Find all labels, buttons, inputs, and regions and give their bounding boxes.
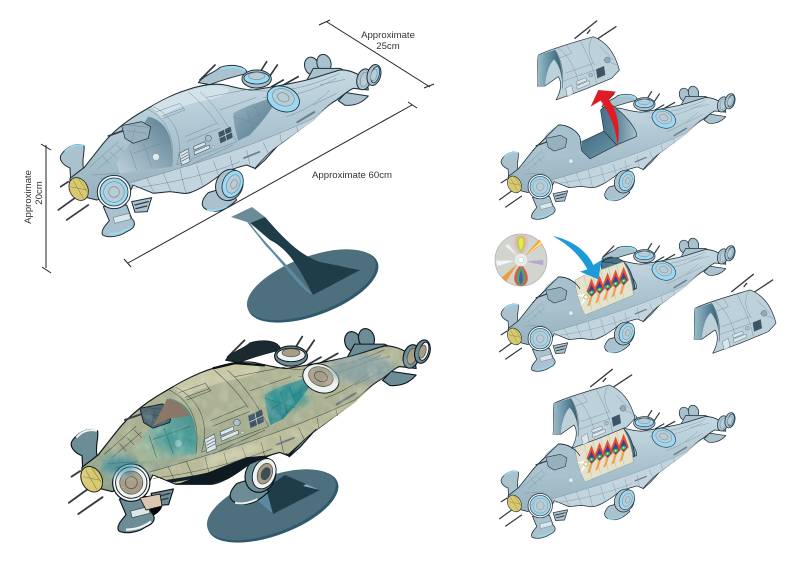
dimension: approximate 60cm: Approximate 60cm <box>312 170 392 181</box>
display stand, grey <box>231 207 388 338</box>
step 2: shell set aside <box>694 274 776 353</box>
dimension: approximate 25cm <box>319 20 434 88</box>
step 1: shell lifted off <box>537 21 619 100</box>
painted ship body <box>69 327 433 533</box>
spaceship, full colour finished model <box>69 327 433 533</box>
step 3: shell being closed <box>553 369 635 448</box>
arrow: blue insert arrow <box>553 236 602 279</box>
spaceship, line art with dimensions <box>58 53 383 237</box>
display stand, finished model <box>198 455 348 558</box>
dimension: approximate 20cm <box>23 144 51 273</box>
step 1: ship with open cavity <box>500 85 737 219</box>
icon: compact disc <box>495 234 547 286</box>
step 2: ship with CD filling <box>500 237 737 371</box>
dimension: approximate 25cm: Approximate <box>361 30 415 41</box>
arrow: red lift arrow <box>591 90 619 147</box>
step 3: ship with CD filling <box>500 404 737 538</box>
dimension: approximate 20cm: Approximate <box>23 170 34 224</box>
black cast shadow under front leg <box>121 494 163 521</box>
white detail on front leg <box>140 494 162 510</box>
dimension: approximate 25cm: 25cm <box>376 41 400 52</box>
dimension: approximate 60cm <box>124 102 417 267</box>
dimension: approximate 20cm: 20cm <box>34 181 45 205</box>
